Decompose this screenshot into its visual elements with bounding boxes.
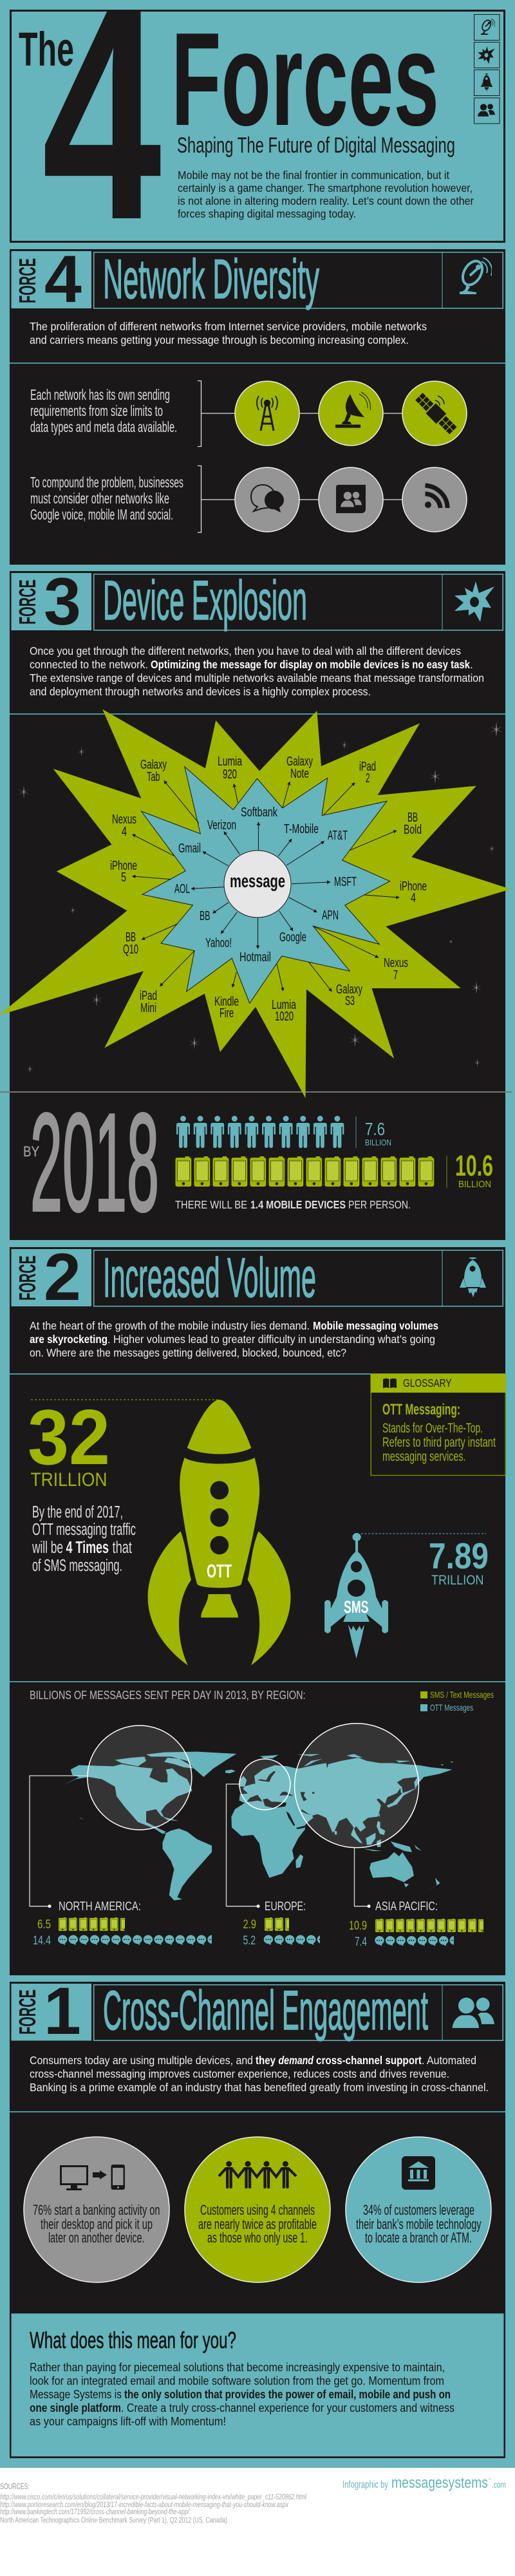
panel: what does this mean for you xyxy=(10,2313,505,2457)
eurasia and africa xyxy=(225,1754,454,1878)
force 1 badge: 1 xyxy=(44,1974,81,2049)
sources: http://www.portioresearch.com/en/blog/2013/17-incredible-facts-about-mobile-messaging-that-you-should-know.aspx xyxy=(0,2501,289,2509)
pictogram: people 7.6 billion: BILLION xyxy=(365,1138,391,1147)
connectors xyxy=(30,1776,368,1906)
row: sending requirements xyxy=(30,381,467,447)
legend: OTT Messages xyxy=(430,1702,473,1713)
device labels: Galaxy xyxy=(286,754,313,769)
text: ott vs sms: 4 Times xyxy=(66,1539,109,1557)
row: sending requirements: requirements from size limits to xyxy=(30,402,163,419)
legend xyxy=(420,1689,494,1713)
device labels: 1020 xyxy=(275,1009,294,1024)
arrows xyxy=(133,781,399,992)
device labels: BB xyxy=(126,930,136,945)
stat circle: four channels: are nearly twice as profitable xyxy=(198,2216,317,2232)
device labels: 7 xyxy=(393,968,398,982)
sources: http://www.cisco.com/c/en/us/solutions/collateral/service-provider/visual-networking-index-vni/white_paper_c11-520862.html xyxy=(0,2494,306,2501)
row: other networks xyxy=(30,466,467,532)
region: asia pacific: 7.4 xyxy=(355,1935,367,1949)
intro text: Mobile messaging volumes xyxy=(313,1319,438,1332)
force 2 badge xyxy=(12,1240,91,1315)
icon: chat bubbles xyxy=(251,485,284,512)
intro text: connected to the network. xyxy=(30,658,148,671)
stat: 7.89 trillion xyxy=(429,1536,489,1588)
device labels: BB xyxy=(407,810,418,825)
force 3 badge: 3 xyxy=(44,565,81,639)
stat circle: four channels xyxy=(185,2137,330,2282)
americas and australia xyxy=(62,1752,440,1901)
device labels: 920 xyxy=(223,767,237,782)
text: ott vs sms: of SMS messaging. xyxy=(32,1557,122,1575)
device labels: Note xyxy=(290,766,309,781)
region: europe: 2.9 xyxy=(243,1918,256,1932)
intro text: At the heart of the growth of the mobile industry lies demand. xyxy=(30,1319,310,1332)
intro text: Banking is a prime example of an industry that has benefited greatly from investing in cross-channel. xyxy=(30,2081,489,2094)
text: ott vs sms xyxy=(32,1503,136,1575)
stat: 32 trillion: TRILLION xyxy=(31,1469,107,1490)
icon: social people xyxy=(336,485,366,513)
device labels: Kindle xyxy=(214,994,239,1009)
device labels: Nexus xyxy=(112,812,136,827)
intro text: cross-channel messaging improves customer experience, reduces costs and drives revenue. xyxy=(30,2067,449,2080)
rocket: sms xyxy=(324,1533,486,1659)
device labels: Q10 xyxy=(123,942,138,957)
region: europe xyxy=(243,1902,320,1945)
intro text: Consumers today are using multiple devices, and xyxy=(30,2054,253,2067)
network labels: Hotmail xyxy=(239,950,271,964)
device labels: Galaxy xyxy=(336,982,362,997)
intro text xyxy=(30,1319,438,1359)
intro paragraph: Mobile may not be the final frontier in communication, but it xyxy=(178,169,449,182)
network labels: AOL xyxy=(174,881,190,896)
device labels: 2 xyxy=(366,771,370,785)
region: asia pacific xyxy=(350,1902,483,1946)
caption: THERE WILL BE xyxy=(175,1198,247,1211)
intro text: . Automated xyxy=(422,2054,476,2067)
device labels: Lumia xyxy=(218,754,242,769)
body text: the only solution that provides the power of email, mobile and push on xyxy=(124,2388,451,2401)
device labels: iPhone xyxy=(110,858,137,873)
device labels: iPad xyxy=(359,759,376,774)
network labels: APN xyxy=(322,908,339,923)
intro text: . Higher volumes lead to greater difficulty in understanding what’s going xyxy=(108,1333,435,1346)
row: other networks: To compound the problem, businesses xyxy=(30,474,183,491)
stat: by 2018: 2018 xyxy=(30,1084,159,1240)
pictogram: devices 10.6 billion: 10.6 xyxy=(455,1149,493,1182)
caption: PER PERSON. xyxy=(348,1198,411,1211)
intro text: and deployment through networks and devices is a highly complex process. xyxy=(30,685,371,698)
network labels: Yahoo! xyxy=(205,935,232,950)
device labels: Lumia xyxy=(272,997,296,1012)
stat: 7.89 trillion: 7.89 xyxy=(429,1536,489,1577)
intro paragraph: is not alone in altering modern reality. Let’s count down the other xyxy=(178,194,474,207)
device labels: Galaxy xyxy=(140,757,167,772)
force 4 badge: FORCE xyxy=(14,258,41,303)
device labels: Nexus xyxy=(384,955,408,970)
body text: . Create a truly cross-channel experience for your customers and witness xyxy=(121,2402,454,2414)
icon: satellite xyxy=(414,391,458,436)
force 3 badge: FORCE xyxy=(14,579,41,625)
panel: force 4 network diversity xyxy=(10,242,505,565)
region: europe: EUROPE: xyxy=(265,1900,306,1913)
sources: SOURCES: xyxy=(0,2481,30,2491)
year heading: BY xyxy=(23,1143,39,1160)
panel: title xyxy=(10,0,505,283)
body text: one single platform xyxy=(30,2402,121,2414)
force 4 badge: 4 xyxy=(44,242,82,317)
text: ott vs sms: that xyxy=(112,1539,132,1557)
stars background xyxy=(19,722,503,1073)
pictogram: people 7.6 billion: 7.6 xyxy=(365,1119,385,1139)
year heading xyxy=(23,1084,159,1240)
force 4 badge xyxy=(12,242,91,317)
intro text: they xyxy=(256,2054,276,2067)
intro text xyxy=(30,2054,489,2094)
panel: force 2 increased volume xyxy=(10,1240,506,1975)
icon: ground dish xyxy=(335,392,370,428)
device labels: Tab xyxy=(147,769,160,784)
world map xyxy=(62,1752,454,1901)
device labels: 5 xyxy=(121,870,126,885)
region: north america: 14.4 xyxy=(33,1934,51,1948)
map heading: BILLIONS OF MESSAGES SENT PER DAY IN 2013, BY REGION: xyxy=(30,1689,305,1702)
force 1 badge xyxy=(12,1974,91,2049)
row: other networks: Google voice, mobile IM and social. xyxy=(30,506,173,523)
glossary box: OTT Messaging: xyxy=(382,1401,460,1418)
intro text xyxy=(30,320,427,346)
intro text: are skyrocketing xyxy=(30,1333,108,1346)
region highlight circles xyxy=(88,1724,419,1848)
panel: force 3 device explosion xyxy=(0,565,512,1240)
region: north america xyxy=(33,1902,212,1945)
network labels: Verizon xyxy=(207,818,236,832)
pictogram: devices 10.6 billion xyxy=(175,1149,493,1190)
pictogram: people 7.6 billion xyxy=(176,1116,391,1148)
pictogram: devices 10.6 billion: BILLION xyxy=(458,1179,491,1190)
credit logo: Infographic by xyxy=(342,2479,388,2490)
stat circle: four channels: as those who only use 1. xyxy=(207,2230,308,2246)
network labels: T-Mobile xyxy=(284,822,319,836)
icon: bank xyxy=(402,2156,435,2190)
text: ott vs sms: will be xyxy=(32,1539,63,1557)
intro text: on. Where are the messages getting delivered, blocked, bounced, etc? xyxy=(30,1346,346,1359)
network labels: Softbank xyxy=(241,805,278,820)
intro paragraph: forces shaping digital messaging today. xyxy=(178,207,356,220)
grey divider xyxy=(0,1091,512,1093)
device labels: iPad xyxy=(140,988,157,1003)
intro text: The extensive range of devices and multiple networks available means that message transformation xyxy=(30,672,484,684)
device labels: 4 xyxy=(122,824,127,839)
intro text: Once you get through the different networks, then you have to deal with all the different devices xyxy=(30,644,461,657)
heading: What does this mean for you? xyxy=(30,2327,236,2353)
region: north america: NORTH AMERICA: xyxy=(59,1900,141,1913)
panel: force 1 cross-channel engagement xyxy=(10,1974,505,2458)
credit logo: messagesystems xyxy=(391,2474,488,2492)
device labels: Bold xyxy=(404,822,422,837)
network labels: MSFT xyxy=(334,874,357,889)
stat circle: desktop to mobile: 76% start a banking activity on xyxy=(33,2202,160,2218)
inner burst: networks xyxy=(141,767,390,1003)
chart: message explosion starburst xyxy=(0,710,510,1098)
rocket: ott: OTT xyxy=(207,1561,232,1582)
icon nav: four forces xyxy=(474,14,500,124)
caption: 1.4 MOBILE DEVICES xyxy=(250,1198,346,1211)
network labels: AT&T xyxy=(328,828,348,843)
stat: 32 trillion xyxy=(28,1393,218,1490)
network labels: Google xyxy=(279,930,306,945)
icon: rss xyxy=(425,485,447,508)
body text: look for an integrated email and mobile software solution from the get go. Momentum from xyxy=(30,2374,444,2387)
outer burst: devices xyxy=(0,710,510,1098)
stat circle: desktop to mobile: their desktop and pick it up xyxy=(41,2216,153,2232)
intro text: cross-channel support xyxy=(316,2054,422,2067)
row: sending requirements: data types and meta data available. xyxy=(30,418,177,435)
stat circle: desktop to mobile xyxy=(24,2137,169,2282)
network labels: Gmail xyxy=(178,841,201,856)
row: other networks: must consider other networks like xyxy=(30,490,169,507)
credit logo: ™ xyxy=(488,2478,491,2482)
intro text: . xyxy=(470,658,473,671)
title word: The: The xyxy=(19,23,74,76)
force 3 badge xyxy=(12,565,91,639)
icon: four people holding hands xyxy=(219,2161,296,2188)
icon: book xyxy=(383,1378,397,1388)
icon: desktop to phone xyxy=(61,2165,125,2190)
text: ott vs sms: OTT messaging traffic xyxy=(32,1521,136,1539)
stat circle: desktop to mobile: later on another device. xyxy=(48,2230,144,2246)
device labels: Mini xyxy=(140,1001,156,1015)
intro text: The proliferation of different networks from Internet service providers, mobile networks xyxy=(30,320,427,333)
glossary box: GLOSSARY xyxy=(403,1377,452,1389)
glossary box: messaging services. xyxy=(382,1449,466,1464)
glossary box xyxy=(371,1374,506,1476)
intro paragraph: certainly is a game changer. The smartphone revolution however, xyxy=(178,182,473,194)
device labels: 4 xyxy=(411,890,416,905)
intro text: demand xyxy=(278,2054,314,2067)
icon: radio tower xyxy=(257,396,277,431)
intro paragraph xyxy=(178,169,474,220)
region: north america: 6.5 xyxy=(37,1918,51,1932)
sources: http://www.bankingtech.com/171992/cross-channel-banking-beyond-the-app/ xyxy=(0,2508,190,2516)
device labels: S3 xyxy=(345,993,355,1008)
network labels xyxy=(174,805,357,964)
row: sending requirements: Each network has its own sending xyxy=(30,386,170,403)
force 2 badge: FORCE xyxy=(14,1255,41,1301)
network labels: BB xyxy=(200,908,210,923)
intro text: and carriers means getting your message through is becoming increasing complex. xyxy=(30,334,409,346)
force 2 badge: 2 xyxy=(44,1240,81,1315)
intro text xyxy=(30,644,484,698)
body text xyxy=(30,2361,454,2428)
intro text: Optimizing the message for display on mobile devices is no easy task xyxy=(151,658,470,671)
center: message xyxy=(224,851,291,917)
credit logo: .com xyxy=(492,2479,506,2490)
stat circle: mobile banking xyxy=(346,2137,491,2282)
header: Device Explosion: Device Explosion xyxy=(103,570,307,632)
device labels: iPhone xyxy=(400,879,427,894)
sources xyxy=(0,2481,306,2524)
body text: Rather than paying for piecemeal solutions that become increasingly expensive to maintain, xyxy=(30,2361,445,2374)
body text: as your campaigns lift-off with Momentum! xyxy=(30,2415,226,2428)
stat: 7.89 trillion: TRILLION xyxy=(431,1573,484,1588)
body text: Message Systems is xyxy=(30,2388,122,2401)
device labels: Fire xyxy=(220,1006,234,1020)
rocket: sms: SMS xyxy=(344,1597,368,1617)
device labels xyxy=(110,754,427,1024)
legend: SMS / Text Messages xyxy=(430,1689,494,1700)
stat circle: four channels: Customers using 4 channels xyxy=(200,2202,315,2218)
region: asia pacific: ASIA PACIFIC: xyxy=(375,1900,438,1913)
rocket: ott xyxy=(148,1400,291,1666)
caption xyxy=(175,1198,411,1211)
region: asia pacific: 10.9 xyxy=(349,1919,367,1933)
force 1 badge: FORCE xyxy=(14,1989,41,2035)
region: europe: 5.2 xyxy=(243,1934,256,1948)
text: ott vs sms: By the end of 2017, xyxy=(32,1503,123,1521)
stat: by 2018 xyxy=(23,1084,493,1240)
sources: North American Technographics Online Benchmark Survey (Part 1), Q2 2012 (US, Canada) xyxy=(0,2517,227,2524)
credit logo xyxy=(342,2474,506,2492)
stat: 32 trillion: 32 xyxy=(28,1393,110,1481)
center: message: message xyxy=(230,871,285,892)
